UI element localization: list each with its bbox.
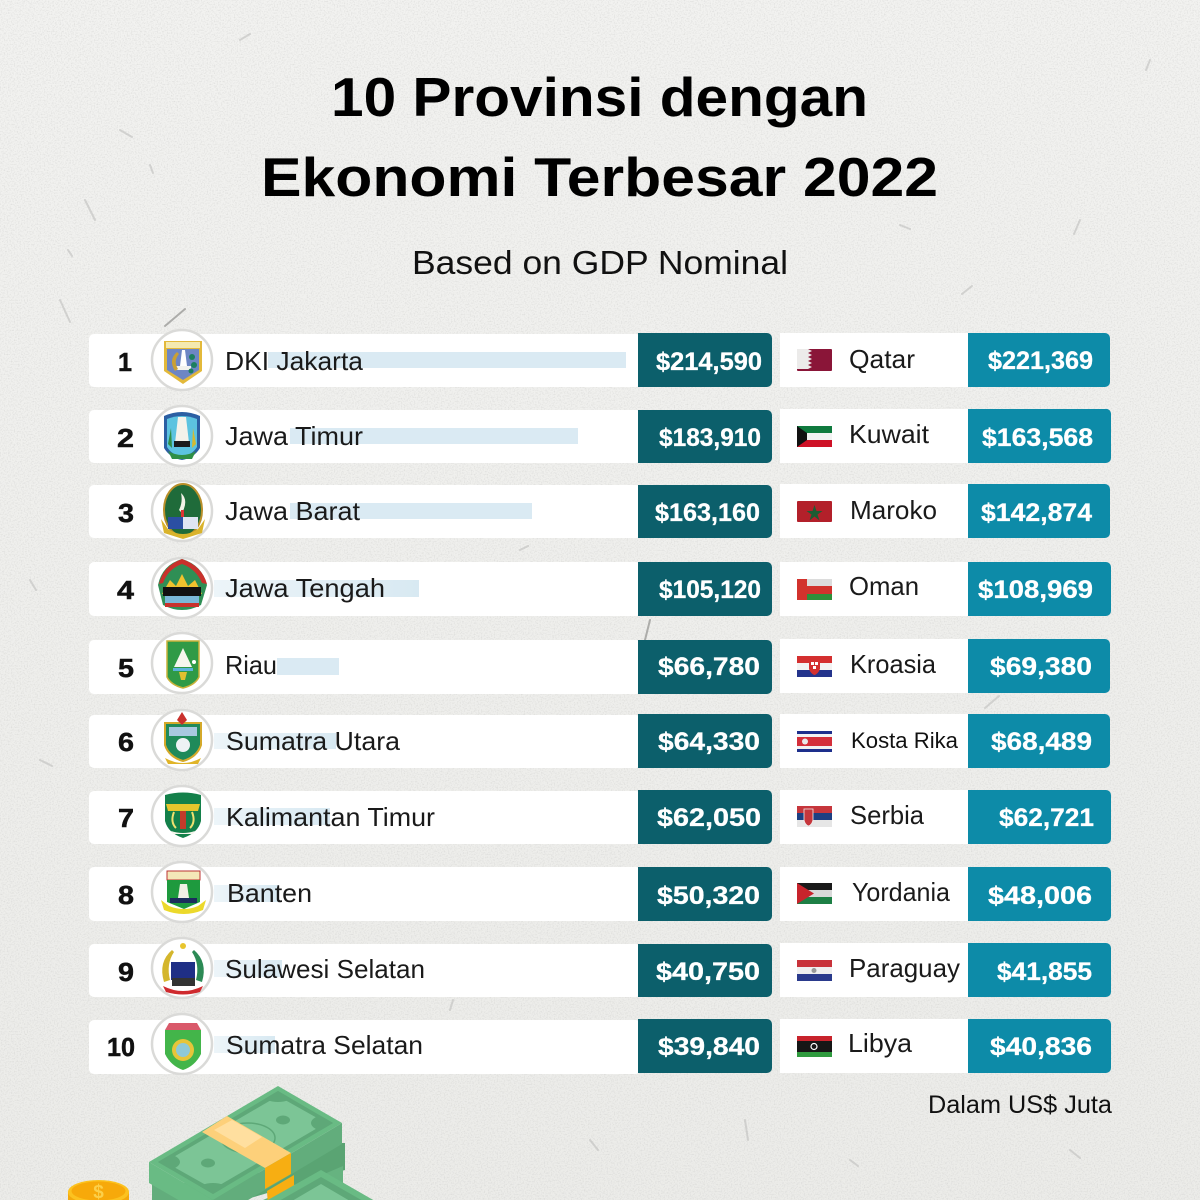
row 10: Sumatra Selatan and Libya: $40,836 bbox=[990, 1033, 1092, 1061]
flag: Yordania bbox=[797, 883, 832, 904]
row 1: DKI Jakarta and Qatar bbox=[89, 330, 1110, 390]
row 10: Sumatra Selatan and Libya: 10 bbox=[107, 1032, 135, 1062]
row 5: Riau and Kroasia: Riau bbox=[225, 650, 277, 680]
row 7: Kalimantan Timur and Serbia: $62,050 bbox=[657, 804, 761, 832]
crest: Kalimantan Timur bbox=[165, 792, 201, 838]
flag: Maroko bbox=[797, 501, 832, 522]
row 2: Jawa Timur and Kuwait: 2 bbox=[117, 423, 134, 453]
row 6: Sumatra Utara and Kosta Rika: Sumatra Utara bbox=[226, 726, 401, 756]
flag: Kroasia bbox=[797, 656, 832, 677]
title: 10 Provinsi dengan bbox=[331, 66, 868, 128]
row 8: Banten and Yordania: $50,320 bbox=[657, 882, 760, 910]
row 3: Jawa Barat and Maroko: 3 bbox=[118, 498, 134, 528]
row 2: Jawa Timur and Kuwait: $183,910 bbox=[659, 424, 761, 452]
row 3: Jawa Barat and Maroko: Jawa Barat bbox=[225, 496, 361, 526]
row 1: DKI Jakarta and Qatar: Qatar bbox=[849, 344, 915, 374]
row 4: Jawa Tengah and Oman: $105,120 bbox=[659, 576, 761, 604]
row 5: Riau and Kroasia: $66,780 bbox=[658, 653, 760, 681]
row 9: Sulawesi Selatan and Paraguay: $41,855 bbox=[997, 958, 1092, 986]
row 6: Sumatra Utara and Kosta Rika bbox=[89, 710, 1110, 770]
row 1: DKI Jakarta and Qatar: $221,369 bbox=[988, 347, 1093, 375]
row 9: Sulawesi Selatan and Paraguay: 9 bbox=[118, 957, 134, 987]
flag: Kosta Rika bbox=[797, 731, 832, 752]
crest: Riau bbox=[167, 641, 199, 688]
flag: Paraguay bbox=[797, 960, 832, 981]
row 7: Kalimantan Timur and Serbia: Serbia bbox=[850, 800, 925, 830]
row 10: Sumatra Selatan and Libya: $39,840 bbox=[658, 1033, 760, 1061]
row 4: Jawa Tengah and Oman: Jawa Tengah bbox=[225, 573, 385, 603]
row 4: Jawa Tengah and Oman: $108,969 bbox=[978, 576, 1093, 604]
icon: front money bundle bbox=[266, 1170, 375, 1200]
icon: back money bundle bbox=[149, 1086, 345, 1200]
row 2: Jawa Timur and Kuwait bbox=[89, 406, 1111, 466]
icon: stack of money and coins bbox=[68, 1086, 375, 1200]
crest: Sumatra Utara bbox=[165, 712, 201, 764]
row 5: Riau and Kroasia: 5 bbox=[118, 653, 134, 683]
row 7: Kalimantan Timur and Serbia: $62,721 bbox=[999, 804, 1094, 832]
row 9: Sulawesi Selatan and Paraguay bbox=[89, 938, 1111, 998]
crest: Jawa Barat bbox=[161, 484, 205, 539]
row 8: Banten and Yordania: Banten bbox=[227, 878, 312, 908]
flag: Kuwait bbox=[797, 426, 832, 447]
unit note: Dalam US$ Juta bbox=[928, 1091, 1112, 1119]
row 8: Banten and Yordania: $48,006 bbox=[988, 882, 1092, 910]
row 2: Jawa Timur and Kuwait: Kuwait bbox=[849, 419, 930, 449]
row 10: Sumatra Selatan and Libya bbox=[89, 1014, 1111, 1074]
row 4: Jawa Tengah and Oman: Oman bbox=[849, 571, 919, 601]
row 6: Sumatra Utara and Kosta Rika: $68,489 bbox=[991, 728, 1092, 756]
row 10: Sumatra Selatan and Libya: Libya bbox=[848, 1028, 913, 1058]
crest: Jawa Tengah bbox=[158, 559, 207, 610]
row 1: DKI Jakarta and Qatar: $214,590 bbox=[656, 348, 762, 376]
row 7: Kalimantan Timur and Serbia: 7 bbox=[118, 803, 134, 833]
row 9: Sulawesi Selatan and Paraguay: Paraguay bbox=[849, 953, 960, 983]
row 5: Riau and Kroasia: $69,380 bbox=[990, 653, 1092, 681]
crest: DKI Jakarta bbox=[164, 341, 202, 384]
row 9: Sulawesi Selatan and Paraguay: Sulawesi Selatan bbox=[225, 954, 425, 984]
row 10: Sumatra Selatan and Libya: Sumatra Selatan bbox=[226, 1030, 423, 1060]
flag: Serbia bbox=[797, 806, 832, 827]
row 3: Jawa Barat and Maroko: $163,160 bbox=[655, 499, 760, 527]
flag: Qatar bbox=[797, 349, 832, 371]
row 5: Riau and Kroasia bbox=[89, 633, 1110, 694]
crest: Sumatra Selatan bbox=[165, 1023, 201, 1070]
title bbox=[261, 66, 938, 208]
row 6: Sumatra Utara and Kosta Rika: 6 bbox=[118, 727, 134, 757]
crest: Banten bbox=[161, 871, 206, 914]
row 6: Sumatra Utara and Kosta Rika: Kosta Rika bbox=[851, 728, 959, 753]
title: Ekonomi Terbesar 2022 bbox=[261, 146, 938, 208]
row 2: Jawa Timur and Kuwait: Jawa Timur bbox=[225, 421, 363, 451]
row 3: Jawa Barat and Maroko bbox=[89, 481, 1110, 541]
row 1: DKI Jakarta and Qatar: 1 bbox=[118, 347, 132, 377]
icon: gold coins bbox=[68, 1180, 129, 1200]
row 8: Banten and Yordania: 8 bbox=[118, 880, 134, 910]
row 8: Banten and Yordania bbox=[89, 862, 1111, 922]
subtitle: Based on GDP Nominal bbox=[412, 244, 788, 281]
row 4: Jawa Tengah and Oman: 4 bbox=[117, 575, 135, 605]
row 8: Banten and Yordania: Yordania bbox=[852, 877, 951, 907]
row 2: Jawa Timur and Kuwait: $163,568 bbox=[982, 424, 1093, 452]
row 9: Sulawesi Selatan and Paraguay: $40,750 bbox=[656, 958, 760, 986]
row 5: Riau and Kroasia: Kroasia bbox=[850, 649, 937, 679]
row 7: Kalimantan Timur and Serbia bbox=[89, 786, 1111, 846]
flag: Oman bbox=[797, 579, 832, 600]
row 4: Jawa Tengah and Oman bbox=[89, 558, 1111, 618]
row 1: DKI Jakarta and Qatar: DKI Jakarta bbox=[225, 346, 364, 376]
crest: Sulawesi Selatan bbox=[162, 943, 204, 994]
flag: Libya bbox=[797, 1036, 832, 1057]
row 7: Kalimantan Timur and Serbia: Kalimantan Timur bbox=[226, 802, 435, 832]
row 3: Jawa Barat and Maroko: $142,874 bbox=[981, 499, 1092, 527]
crest: Jawa Timur bbox=[164, 412, 200, 460]
row 3: Jawa Barat and Maroko: Maroko bbox=[850, 495, 937, 525]
row 6: Sumatra Utara and Kosta Rika: $64,330 bbox=[658, 728, 760, 756]
